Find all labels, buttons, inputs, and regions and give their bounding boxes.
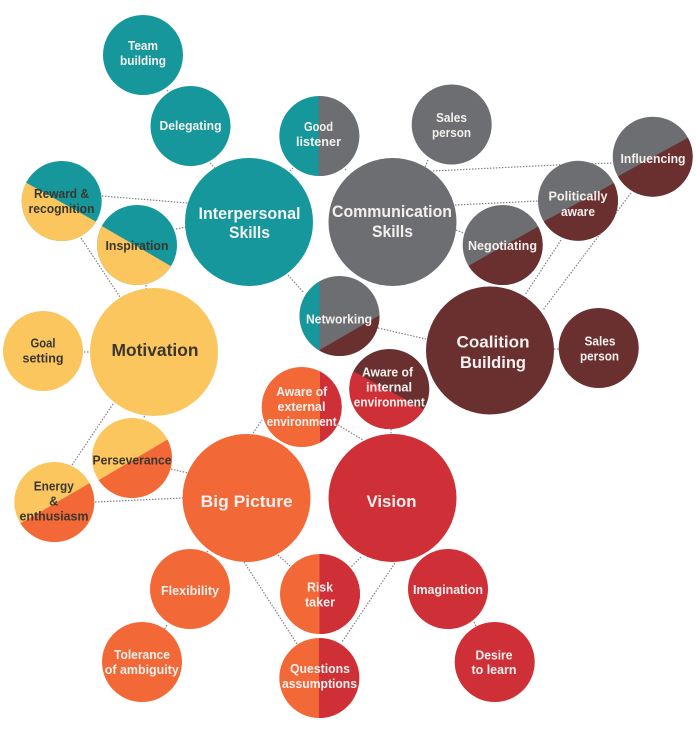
bubble: Team building: Team [128,39,158,53]
bubble: Coalition Building: Coalition [456,332,530,352]
bubble: Negotiating [461,205,544,286]
bubble: Desire to learn [455,622,535,702]
bubble: Goal setting [3,311,83,391]
bubble: Inspiration: Inspiration [106,239,168,253]
bubble: Networking [299,275,381,357]
bubble: Imagination: Imagination [413,583,483,597]
bubble: Energy and enthusiasm: Energy [34,480,74,494]
bubble: Goal setting: setting [22,352,64,366]
bubble: Questions assumptions: assumptions [282,677,357,691]
bubble: Motivation: Motivation [112,340,198,360]
bubble: Reward and recognition [21,161,103,242]
bubble: Energy and enthusiasm: enthusiasm [20,510,88,524]
bubble: Delegating [150,86,230,166]
bubble: Communication Skills: Skills [372,222,413,241]
bubble: Energy and enthusiasm: & [49,495,58,509]
bubble: Negotiating: Negotiating [468,239,537,253]
dotted connector lines [72,90,631,644]
bubble: Sales person (coalition): person [580,350,619,364]
bubble: Sales person (communication) [412,84,492,164]
bubble: Energy and enthusiasm [13,462,96,543]
bubble: Good listener: Good [304,120,333,134]
bubble: Desire to learn: to learn [472,663,516,677]
bubble: Reward and recognition: recognition [28,202,94,216]
bubble: Desire to learn: Desire [476,648,513,662]
bubble: Big Picture [182,434,310,562]
bubble: Flexibility [150,549,230,629]
bubble: Imagination [408,549,488,629]
bubble: Aware of external environment: environment [267,415,337,429]
bubble: Aware of internal environment [348,349,430,430]
bubble: Influencing [612,117,694,198]
bubble: Tolerance of ambiguity [102,622,182,702]
bubble: Politically aware: aware [561,205,595,219]
bubble: Inspiration [96,205,178,286]
bubble: Team building: building [120,54,166,68]
bubble: Risk taker: taker [305,596,335,610]
bubble: Delegating: Delegating [160,119,222,133]
bubble: Sales person (communication): Sales [436,111,467,125]
bubble: Aware of internal environment: environment [354,396,426,410]
bubble: Interpersonal Skills: Interpersonal [198,204,300,223]
bubble: Sales person (coalition) [559,308,639,388]
bubble: Tolerance of ambiguity: Tolerance [114,648,170,662]
bubble: Communication Skills: Communication [332,202,452,221]
bubble: Coalition Building: Building [460,353,526,372]
bubble: Networking: Networking [306,312,372,326]
bubble: Politically aware [537,161,619,242]
bubble: Aware of external environment: external [278,400,326,414]
bubble: Aware of internal environment: internal [366,381,412,395]
bubble: Perseverance [91,418,173,499]
bubble: Communication Skills [328,158,456,286]
bubble: Motivation [90,288,218,416]
bubble: Sales person (coalition): Sales [584,334,616,348]
bubble: Interpersonal Skills: Skills [229,223,270,242]
bubble: Interpersonal Skills [185,158,313,286]
bubble: Politically aware: Politically [548,190,608,204]
bubble: Good listener [279,95,361,177]
bubble: Reward and recognition: Reward & [34,187,89,201]
bubble: Questions assumptions: Questions [290,662,350,676]
bubble: Perseverance: Perseverance [92,453,172,467]
bubble: Tolerance of ambiguity: of ambiguity [105,663,179,677]
bubble: Goal setting: Goal [30,336,56,350]
bubble: Aware of internal environment: Aware of [362,366,414,380]
bubble: Big Picture: Big Picture [201,492,293,511]
bubble: Questions assumptions [279,637,360,719]
bubble: Risk taker: Risk [307,581,333,595]
bubble: Influencing: Influencing [620,152,686,166]
bubble: Aware of external environment [262,366,342,448]
bubble: Good listener: listener [296,135,341,149]
bubble: Sales person (communication): person [432,126,471,140]
bubble: Aware of external environment: Aware of [276,385,328,399]
bubble: Team building [103,15,183,95]
bubble: Flexibility: Flexibility [161,584,219,598]
bubble: Vision [328,434,456,562]
bubble: Risk taker [280,553,361,635]
bubble: Coalition Building [426,286,554,414]
bubble: Vision: Vision [366,492,416,511]
